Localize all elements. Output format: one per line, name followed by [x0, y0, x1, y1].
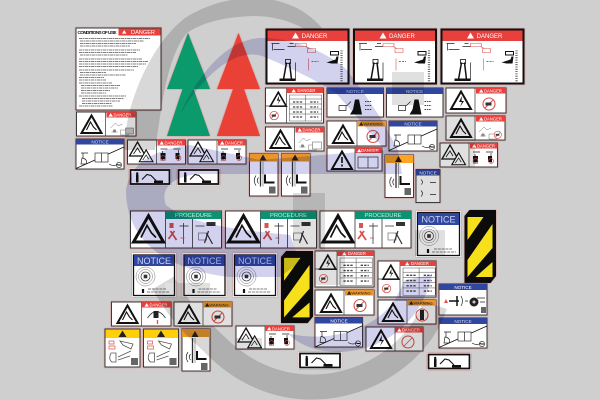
panel: small notice: NOTICE [419, 170, 437, 176]
panel: danger pair 2: DANGER [225, 141, 243, 146]
panel: danger table 2 [315, 251, 374, 287]
panel: electric danger 2 [366, 327, 423, 351]
panel: warning 2 [315, 290, 374, 315]
panel: danger pair 3: DANGER [477, 144, 495, 149]
panel: large danger 1 [266, 30, 348, 84]
panel: fork diagram 4 [182, 329, 210, 371]
panel: electric danger [446, 88, 506, 113]
panel: yellow caution 1 [105, 329, 140, 367]
panel: notice lift 1 [327, 88, 384, 117]
panel: danger table 3 [378, 261, 436, 297]
panel: excavator 1 [129, 168, 171, 186]
panel: danger swing [112, 302, 171, 326]
panel: procedure 3 [320, 211, 411, 248]
panel: notice book 4 [315, 318, 363, 347]
panel: warning 3 [378, 300, 436, 324]
panel: notice gear 2: NOTICE [187, 256, 222, 266]
panel: procedure 1: PROCEDURE [175, 213, 212, 219]
panel: large danger 2: DANGER [389, 34, 416, 40]
panel: excavator 2 [177, 168, 220, 186]
panel: notice book 3: NOTICE [454, 319, 472, 324]
panel: danger read manual: DANGER [361, 148, 379, 153]
text block [79, 38, 150, 106]
panel: notice book 2: NOTICE [404, 122, 422, 127]
panel: danger crush: DANGER [484, 117, 502, 122]
panel: danger fall 2: DANGER [303, 128, 320, 133]
heading: conditions of use: CONDITIONS OF USE [78, 30, 116, 35]
panel: notice wheel: NOTICE [454, 285, 472, 290]
panel: warning 4: WARNING [209, 303, 229, 308]
icon: red double arrow [217, 33, 260, 136]
panel: procedure 2: PROCEDURE [270, 213, 307, 219]
panel: danger crush [446, 116, 505, 140]
panel: danger table 1: DANGER [298, 88, 315, 93]
panel: notice gear 2 [182, 253, 226, 297]
panel: danger pair 4 [236, 326, 294, 349]
panel: large danger 2 [354, 30, 436, 84]
panel: yellow caution 2 [144, 329, 178, 367]
panel: small notice [416, 170, 440, 202]
panel: warning 1 [327, 121, 386, 146]
panel: notice book [76, 139, 124, 169]
icon: green double arrow [167, 33, 210, 136]
header: danger: DANGER [131, 30, 155, 36]
panel: excavator 4 [427, 353, 471, 370]
panel: notice lift 1: NOTICE [346, 89, 364, 94]
panel: notice book 2 [389, 121, 437, 151]
panel: notice book 3 [439, 318, 487, 348]
panel: large danger 3 [442, 30, 524, 84]
panel: notice lift 2: NOTICE [406, 89, 423, 94]
panel: electric danger 2: DANGER [402, 328, 420, 333]
panel: danger table 3: DANGER [411, 261, 429, 266]
panel: danger pair 1: DANGER [165, 141, 182, 146]
panel: danger pair 2 [188, 140, 246, 164]
panel: fork diagram 2 [282, 154, 310, 196]
panel: procedure 2 [226, 211, 316, 248]
panel: danger read manual [327, 148, 382, 171]
panel: notice gear 3: NOTICE [238, 256, 272, 266]
panel: conditions of use [76, 28, 161, 110]
panel: notice book: NOTICE [91, 140, 109, 145]
watermark logo [124, 0, 476, 387]
panel: warning 4 [174, 302, 232, 326]
panel: notice gear 3 [233, 253, 277, 297]
icon: hazard stripe 2 [281, 251, 313, 323]
panel: danger pair 3 [440, 143, 498, 167]
panel: notice gear 1: NOTICE [137, 256, 171, 266]
panel: electric danger: DANGER [484, 89, 502, 94]
panel: notice gear large: NOTICE [421, 214, 456, 224]
panel: notice gear large [416, 211, 461, 257]
panel: danger table 2: DANGER [348, 251, 366, 256]
panel: procedure 1 [130, 211, 222, 248]
panel: danger pair 4: DANGER [272, 326, 290, 331]
panel: fork diagram 3 [385, 155, 414, 198]
panel: procedure 3: PROCEDURE [364, 213, 402, 219]
panel: notice book 4: NOTICE [330, 318, 348, 324]
panel: notice wheel [439, 284, 487, 315]
panel: warning 3: WARNING [413, 301, 433, 306]
panel: fork diagram 1 [250, 154, 278, 196]
panel: danger pair 1 [128, 140, 186, 164]
panel: danger swing: DANGER [150, 303, 167, 308]
panel: warning 2: WARNING [351, 291, 371, 296]
panel: danger fall 2 [266, 127, 324, 151]
panel: large danger 3: DANGER [477, 34, 503, 40]
panel: notice lift 2 [386, 88, 443, 117]
panel: small danger: DANGER [114, 112, 131, 118]
panel: notice gear 1 [132, 253, 176, 297]
panel: excavator 3 [298, 352, 342, 369]
icon: hazard stripe 1 [464, 210, 496, 283]
panel: large danger 1: DANGER [302, 34, 328, 40]
panel: small danger [76, 112, 136, 136]
panel: warning 1: WARNING [363, 122, 383, 127]
panel: danger table 1 [266, 88, 324, 123]
